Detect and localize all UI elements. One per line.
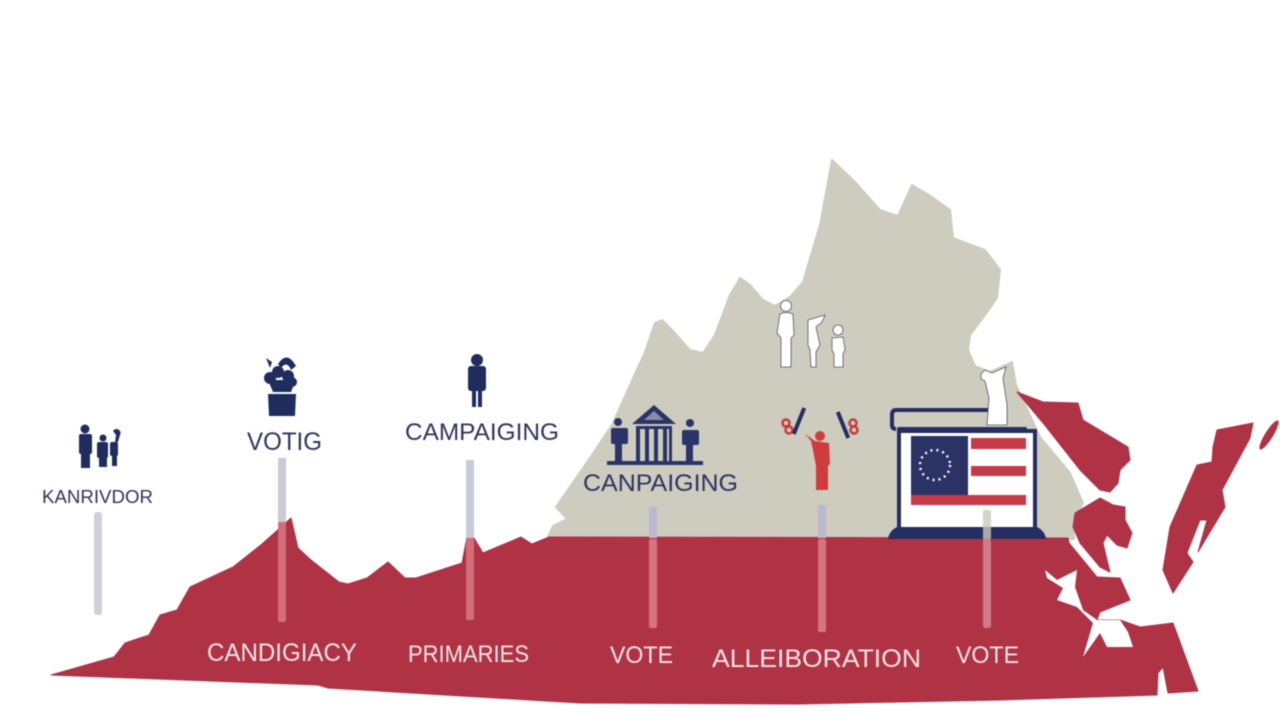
label: ALLEIBORATION: ALLEIBORATION — [712, 645, 921, 673]
map: middle bay lobe — [1073, 498, 1132, 572]
label: VOTE, first: VOTE — [610, 642, 673, 669]
map: upper bay lobe — [1017, 392, 1130, 492]
icon: potted plant — [264, 357, 297, 416]
flag stripes — [971, 438, 1026, 449]
icon: left megaphone and knot — [782, 407, 806, 435]
map: eastern shore island — [1163, 423, 1253, 593]
label: VOTIG: VOTIG — [247, 428, 322, 456]
icon: red speaker figure — [782, 407, 858, 490]
pole over base — [983, 527, 991, 539]
map: inlet cut-out — [1045, 570, 1133, 657]
icon: white family figures — [777, 300, 845, 367]
map: main red region — [51, 518, 1198, 704]
label: CANPAIGING, on grey: CANPAIGING — [583, 470, 738, 497]
screen pole segment — [983, 510, 991, 528]
map: upper grey region — [547, 160, 1083, 539]
label: CAMPAIGING, upper: CAMPAIGING — [405, 419, 559, 446]
timeline marker poles — [94, 458, 991, 632]
laptop body — [899, 431, 1035, 531]
label: PRIMARIES: PRIMARIES — [408, 641, 529, 668]
icon: courthouse with podiums — [607, 405, 703, 465]
icon: white animal figure on laptop — [981, 367, 1007, 425]
laptop lid tab — [892, 410, 1000, 429]
flag canton with stars — [911, 436, 968, 495]
icon: laptop with flag — [888, 410, 1046, 539]
label: KANRIVDOR: KANRIVDOR — [42, 487, 153, 507]
laptop base — [888, 527, 1046, 539]
map: small island — [1257, 418, 1280, 452]
icon: family group — [79, 424, 121, 468]
icon: standing person — [468, 354, 486, 407]
label: CANDIGIACY: CANDIGIACY — [207, 639, 357, 667]
label: VOTE, second: VOTE — [956, 642, 1019, 669]
icon: right megaphone and knot — [836, 411, 858, 439]
